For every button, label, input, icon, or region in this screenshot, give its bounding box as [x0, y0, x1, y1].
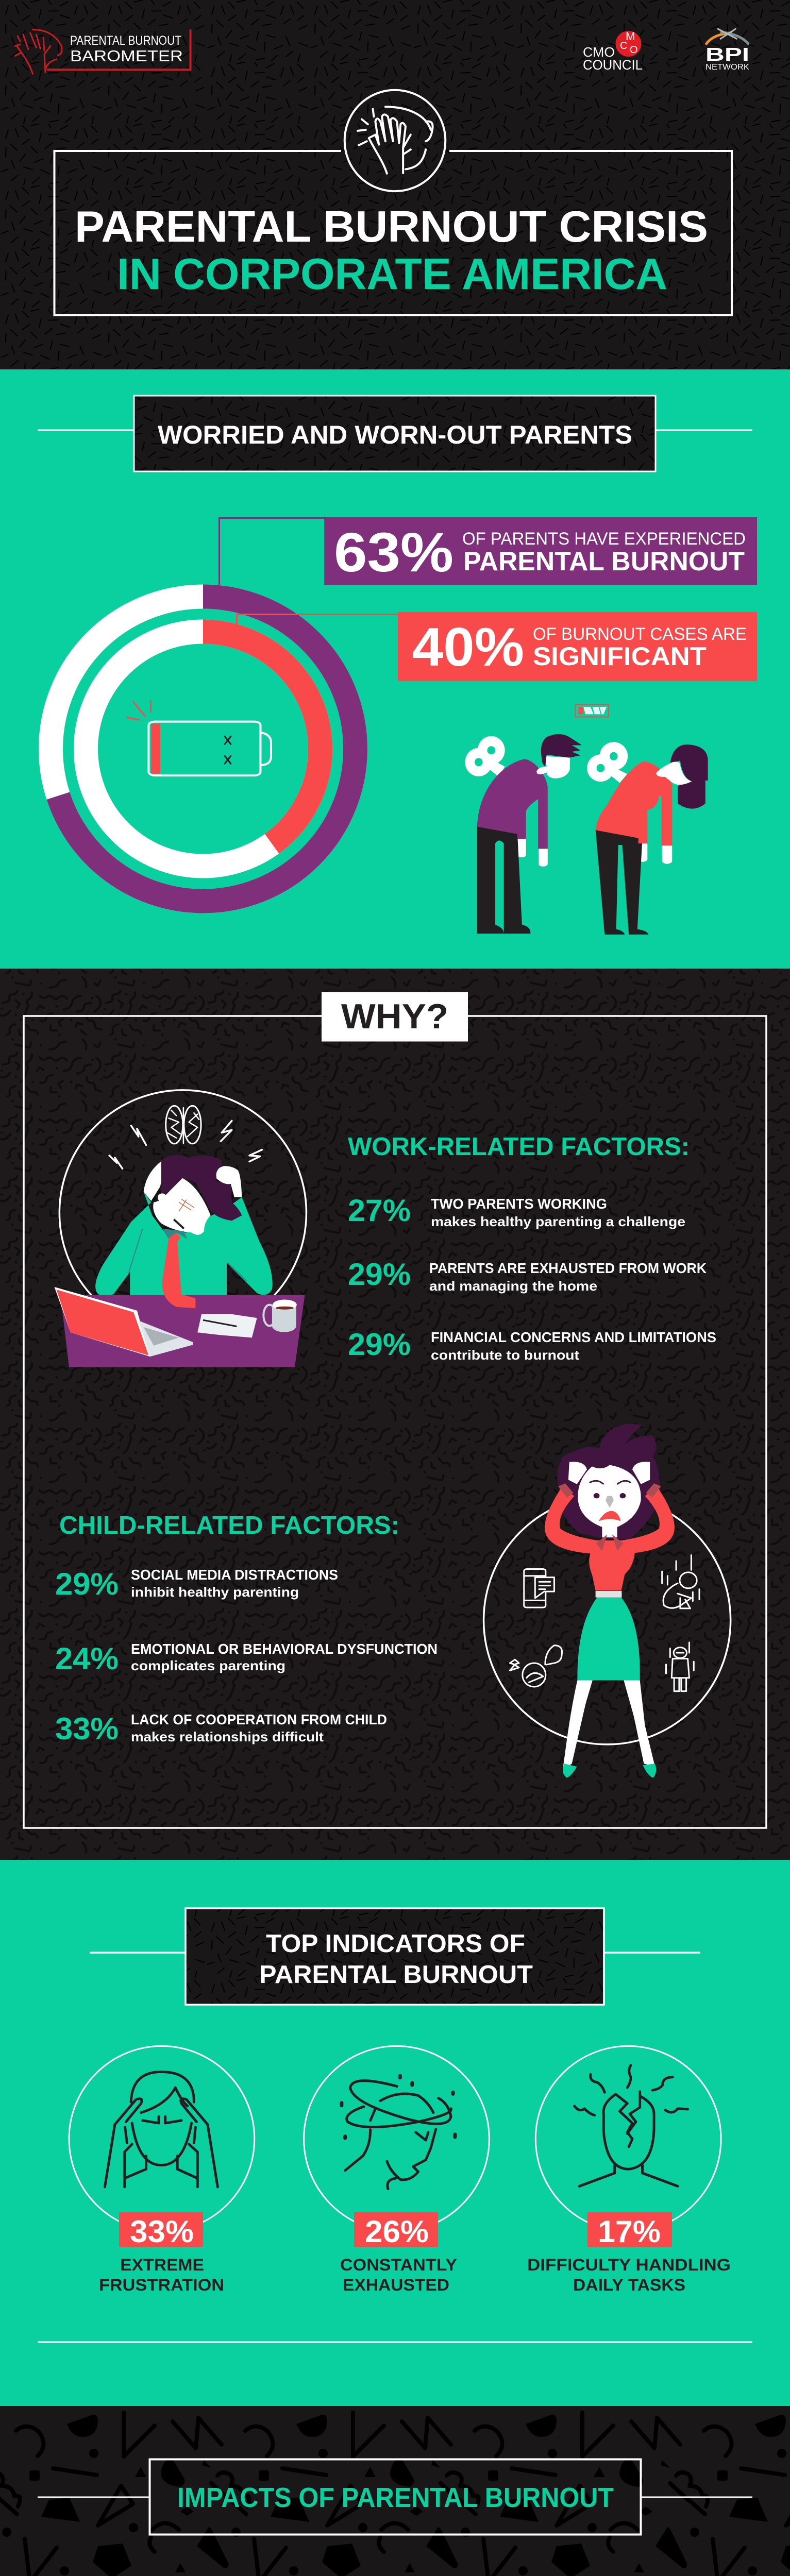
stat: 24% emotional dysfunction [55, 1641, 438, 1676]
stat: 29% social media: 29% [55, 1567, 119, 1601]
frame [24, 1016, 766, 1828]
logo: Parental Burnout Barometer: BAROMETER [70, 47, 183, 65]
heading: top indicators of parental burnout: TOP INDICATORS OF [266, 1930, 525, 1958]
stat: 27% two parents working: makes healthy parenting a challenge [431, 1214, 685, 1229]
stat: 33% lack of cooperation: 33% [55, 1711, 119, 1746]
logo: CMO Council [583, 30, 643, 73]
indicator: extreme frustration: EXTREME [120, 2256, 204, 2274]
logo: CMO Council: C [620, 40, 627, 52]
heading: why: WHY? [341, 997, 448, 1036]
illustration: stressed worker at desk [55, 1090, 306, 1367]
stat: 27% two parents working [348, 1193, 685, 1229]
panel: why [0, 969, 790, 1860]
logo: CMO Council: O [630, 44, 638, 56]
icon: empty battery [127, 701, 271, 775]
indicator: extreme frustration [69, 2046, 255, 2294]
stat: 24% emotional dysfunction: 24% [55, 1641, 119, 1676]
illustration: stressed mother and child-related icons [484, 1423, 731, 1778]
logo: BPI Network: BPI [705, 44, 749, 65]
stat: 24% emotional dysfunction: complicates parenting [131, 1658, 285, 1673]
heading: work-related factors: WORK-RELATED FACTORS: [348, 1133, 690, 1161]
panel: top indicators [0, 1860, 790, 2406]
logo: CMO Council: CMO [583, 44, 615, 60]
heading: top indicators of parental burnout: PARENTAL BURNOUT [259, 1961, 533, 1989]
heading: child-related factors: CHILD-RELATED FACTORS: [59, 1512, 399, 1539]
indicator: extreme frustration: FRUSTRATION [99, 2276, 224, 2294]
callout: 63% parental burnout: PARENTAL BURNOUT [463, 547, 745, 577]
callout: 63% parental burnout: OF PARENTS HAVE EXPERIENCED [462, 529, 746, 549]
stat: 29% social media [55, 1567, 338, 1601]
heading: impacts of parental burnout: IMPACTS OF PARENTAL BURNOUT [177, 2482, 614, 2513]
indicator: difficulty handling daily tasks: 17% [598, 2214, 661, 2249]
indicator: constantly exhausted: 26% [365, 2214, 429, 2249]
indicator: difficulty handling daily tasks [527, 2046, 731, 2294]
indicator: constantly exhausted: CONSTANTLY [340, 2256, 457, 2274]
stat: 33% lack of cooperation: LACK OF COOPERATION FROM CHILD [131, 1711, 387, 1727]
title: IN CORPORATE AMERICA [117, 250, 667, 299]
stat: 24% emotional dysfunction: EMOTIONAL OR BEHAVIORAL DYSFUNCTION [131, 1641, 438, 1657]
stat: 29% exhausted parents [348, 1257, 707, 1294]
callout: 40% significant: SIGNIFICANT [533, 642, 707, 671]
title [75, 202, 708, 299]
stat: 27% two parents working: TWO PARENTS WORKING [431, 1196, 607, 1212]
panel: header [0, 0, 790, 369]
logo: Parental Burnout Barometer [15, 29, 191, 74]
stat: 33% lack of cooperation: makes relationships difficult [131, 1729, 324, 1744]
stat: 29% financial concerns [348, 1327, 716, 1363]
title frame and icon [55, 90, 732, 315]
stat: 29% exhausted parents: and managing the home [429, 1278, 597, 1294]
stat: 27% two parents working: 27% [348, 1193, 411, 1228]
stat: 29% financial concerns: contribute to burnout [431, 1347, 579, 1363]
callout: 40% significant [237, 612, 757, 681]
logo: BPI Network: NETWORK [705, 63, 749, 72]
stat: 33% lack of cooperation [55, 1711, 387, 1746]
indicator: difficulty handling daily tasks: DAILY TASKS [573, 2276, 685, 2294]
heading: impacts of parental burnout [38, 2460, 752, 2535]
logo: CMO Council: COUNCIL [583, 57, 643, 73]
stat: 29% exhausted parents: 29% [348, 1257, 411, 1292]
callout: 40% significant: OF BURNOUT CASES ARE [533, 624, 747, 644]
stat: 29% exhausted parents: PARENTS ARE EXHAUSTED FROM WORK [429, 1260, 707, 1276]
logo: BPI Network [705, 29, 749, 72]
donut chart: 63% and 40% [51, 597, 356, 901]
indicator: difficulty handling daily tasks: DIFFICULTY HANDLING [527, 2256, 731, 2274]
heading: worried and worn-out parents [38, 396, 752, 471]
logo: CMO Council: M [626, 30, 635, 43]
stat: 29% financial concerns: 29% [348, 1327, 411, 1362]
stat: 29% social media: inhibit healthy parenting [131, 1584, 299, 1600]
panel: worried and worn-out parents [0, 369, 790, 969]
panel: impacts [0, 2406, 790, 2576]
heading: top indicators of parental burnout [90, 1908, 700, 2005]
heading: worried and worn-out parents: WORRIED AND WORN-OUT PARENTS [158, 420, 632, 449]
stat: 29% financial concerns: FINANCIAL CONCERNS AND LIMITATIONS [431, 1329, 716, 1345]
indicator: extreme frustration: 33% [130, 2214, 194, 2249]
stat: 29% social media: SOCIAL MEDIA DISTRACTIONS [131, 1567, 338, 1583]
callout: 63% parental burnout: 63% [334, 521, 453, 583]
logo: Parental Burnout Barometer: PARENTAL BURNOUT [70, 33, 181, 48]
callout: 40% significant: 40% [412, 617, 524, 677]
indicator: constantly exhausted [304, 2046, 489, 2294]
illustration: worn-out parents with wind-up keys [465, 704, 708, 935]
heading: why [322, 992, 468, 1042]
callout: 63% parental burnout [220, 517, 757, 585]
title: PARENTAL BURNOUT CRISIS [75, 202, 708, 251]
indicator: constantly exhausted: EXHAUSTED [343, 2276, 449, 2294]
